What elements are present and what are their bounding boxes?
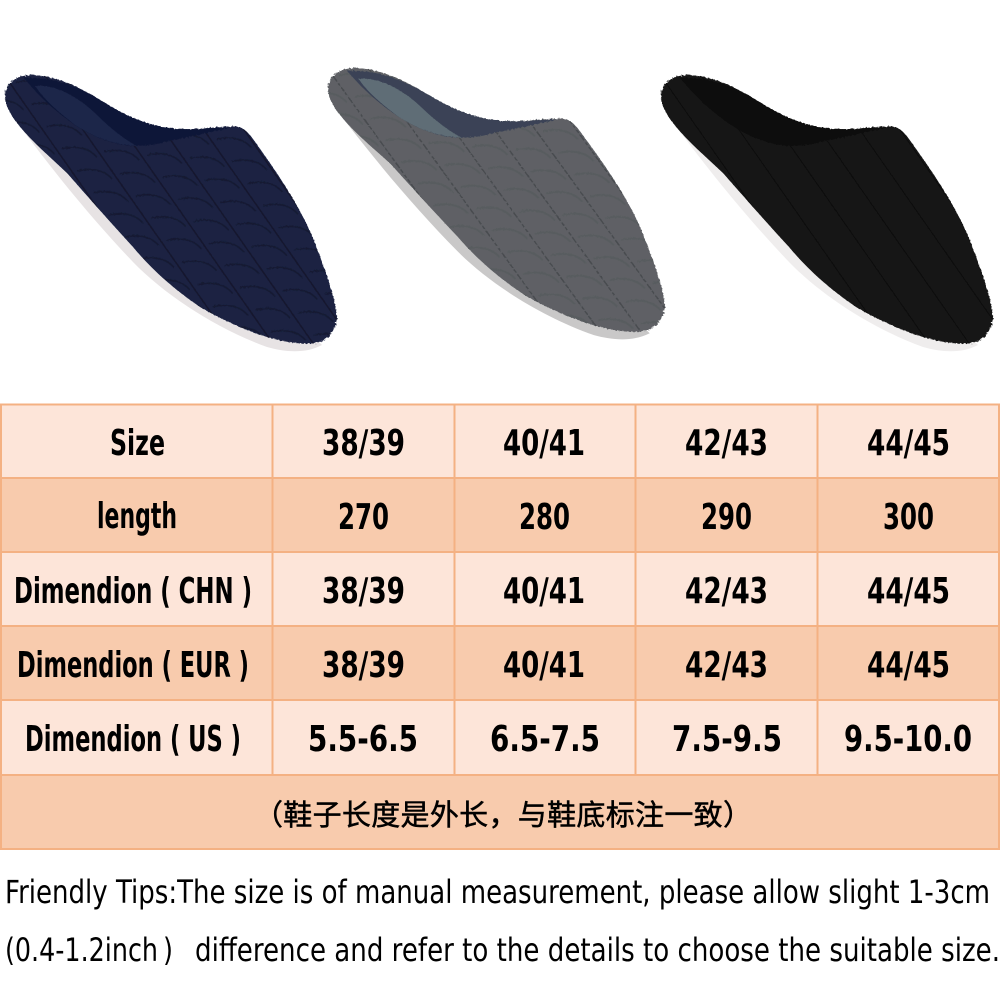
product photo: black slipper — [661, 75, 993, 351]
row: Size: 38/39 — [322, 423, 405, 464]
row: length: 300 — [883, 497, 934, 538]
row backgrounds — [0, 404, 1000, 850]
row: Dimendion EUR: 40/41 — [503, 645, 585, 686]
product photo: navy slipper — [5, 75, 337, 351]
friendly tips text: ) — [163, 931, 173, 969]
row: length: 280 — [519, 497, 570, 538]
row: Dimendion US — [25, 719, 972, 760]
row: Size — [110, 423, 950, 464]
row: Dimendion CHN: 38/39 — [322, 571, 405, 612]
row: Size: 44/45 — [867, 423, 950, 464]
row: Dimendion CHN: Dimendion ( CHN ) — [14, 571, 252, 612]
friendly tips text: (0.4-1.2inch — [5, 931, 158, 969]
friendly tips text — [5, 873, 1000, 969]
row: Size: Size — [110, 423, 165, 464]
row: Dimendion CHN: 42/43 — [685, 571, 768, 612]
row: Dimendion CHN: 44/45 — [867, 571, 950, 612]
row: Dimendion US: Dimendion ( US ) — [25, 719, 241, 760]
row: Dimendion EUR — [17, 645, 950, 686]
product photo: gray slipper — [328, 68, 665, 339]
row: Dimendion EUR: Dimendion ( EUR ) — [17, 645, 249, 686]
row: Dimendion US: 6.5-7.5 — [490, 719, 600, 760]
row: Size: 40/41 — [503, 423, 585, 464]
note row: Chinese length note: （鞋子长度是外长，与鞋底标注一致） — [254, 799, 752, 832]
row: Dimendion EUR: 42/43 — [685, 645, 768, 686]
row: length: 270 — [338, 497, 389, 538]
row: Dimendion CHN: 40/41 — [503, 571, 585, 612]
row: Dimendion EUR: 38/39 — [322, 645, 405, 686]
row: Size: 42/43 — [685, 423, 768, 464]
row: Dimendion CHN — [14, 571, 950, 612]
row: Dimendion US: 7.5-9.5 — [672, 719, 782, 760]
row: length: 290 — [701, 497, 752, 538]
row: Dimendion US: 5.5-6.5 — [308, 719, 418, 760]
row: length: length — [97, 496, 177, 537]
row: length — [97, 496, 934, 538]
row: Dimendion EUR: 44/45 — [867, 645, 950, 686]
size table — [0, 404, 1000, 850]
